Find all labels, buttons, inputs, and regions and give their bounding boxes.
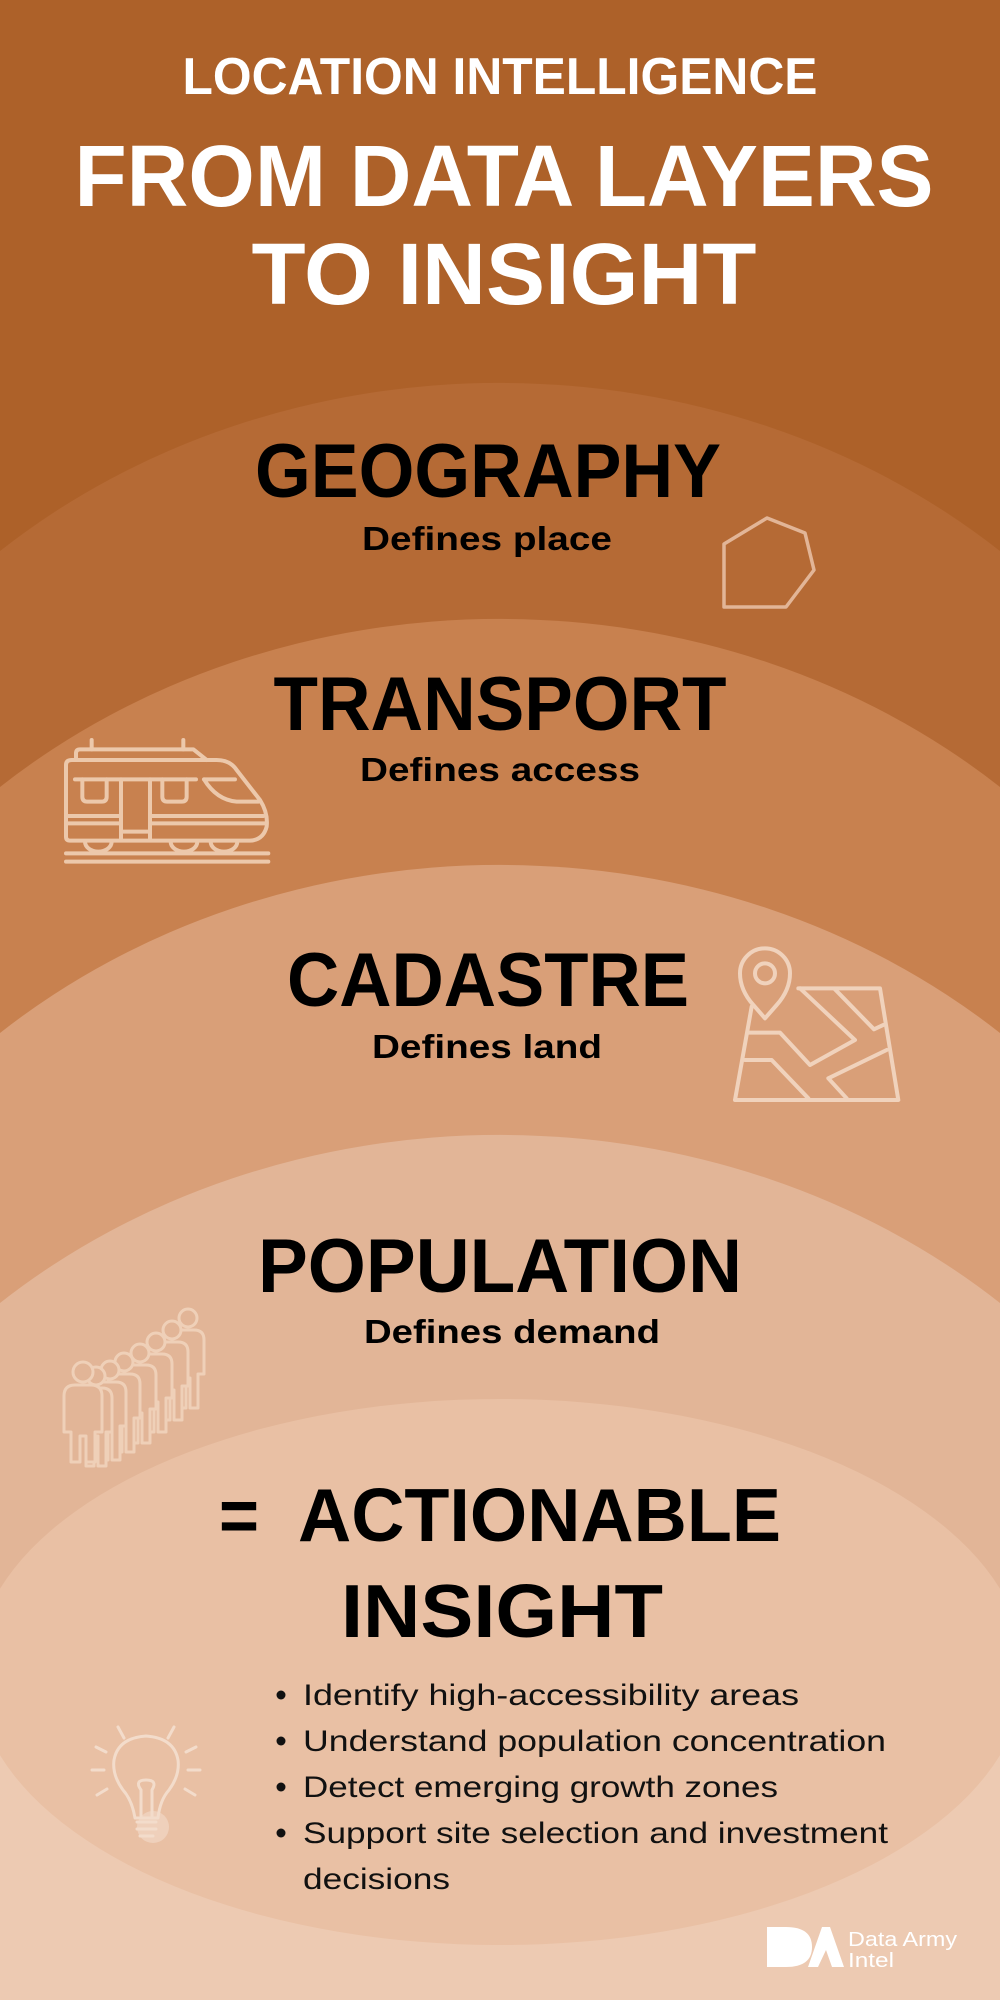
- icon: map pin: [735, 948, 898, 1100]
- bullet list: Detect emerging growth zones: [303, 1771, 778, 1804]
- result heading: actionable insight: [219, 1473, 781, 1653]
- icon: lightbulb: [92, 1727, 200, 1843]
- layer: transport: TRANSPORT: [274, 662, 726, 747]
- result heading: actionable insight: INSIGHT: [341, 1569, 663, 1653]
- bullet list: decisions: [303, 1863, 450, 1896]
- logo: Data Army Intel: Intel: [848, 1950, 894, 1972]
- logo: Data Army Intel: Data Army: [848, 1929, 957, 1951]
- icon: polygon: [724, 518, 814, 607]
- title: [74, 128, 934, 323]
- bullet list: Identify high-accessibility areas: [303, 1679, 799, 1712]
- title: FROM DATA LAYERS: [74, 128, 934, 225]
- icon: people: [64, 1309, 204, 1466]
- bullet list: [276, 1679, 889, 1896]
- layer: geography: Defines place: [362, 520, 612, 557]
- title: TO INSIGHT: [252, 226, 756, 323]
- bullet list: Understand population concentration: [303, 1725, 886, 1758]
- layer: cadastre: [287, 938, 689, 1065]
- layer: transport: [274, 662, 726, 788]
- kicker: location intelligence: LOCATION INTELLIGENCE: [182, 48, 818, 106]
- layer: population: [258, 1224, 742, 1350]
- layer: geography: GEOGRAPHY: [255, 429, 721, 514]
- icon: train: [66, 740, 268, 862]
- layer: cadastre: CADASTRE: [287, 938, 689, 1023]
- layer: cadastre: Defines land: [372, 1028, 602, 1065]
- layer: population: POPULATION: [258, 1224, 742, 1309]
- layer: geography: [255, 429, 721, 557]
- layer: transport: Defines access: [360, 751, 640, 788]
- result heading: actionable insight: =: [219, 1473, 259, 1557]
- bullet list: Support site selection and investment: [303, 1817, 889, 1850]
- logo: Data Army Intel: [767, 1927, 957, 1972]
- layer: population: Defines demand: [364, 1313, 660, 1350]
- result heading: actionable insight: ACTIONABLE: [298, 1473, 781, 1557]
